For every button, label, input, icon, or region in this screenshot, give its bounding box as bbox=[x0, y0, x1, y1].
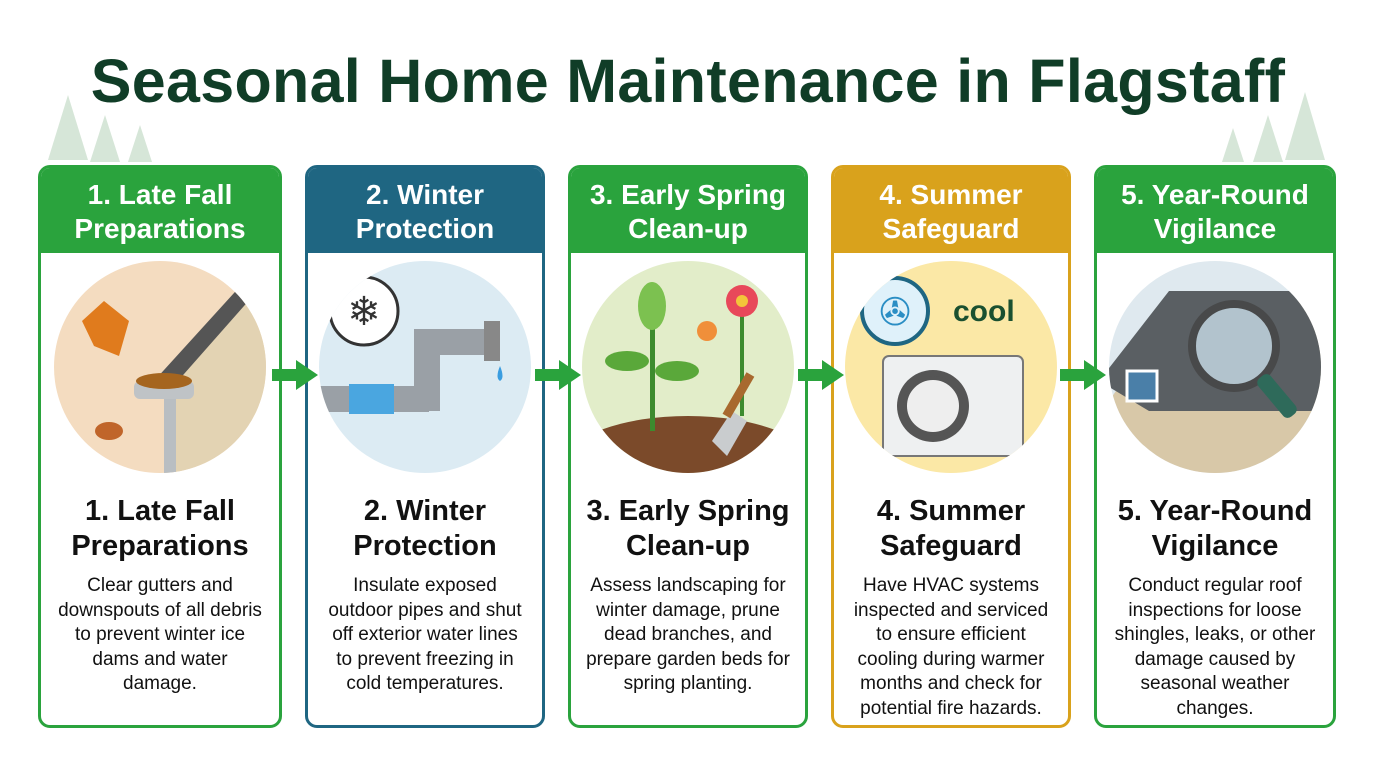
subtitle bbox=[71, 495, 249, 562]
header bbox=[571, 168, 805, 253]
header: 3. Early Spring bbox=[590, 179, 786, 210]
background trees bbox=[48, 92, 1325, 162]
panel: year-round bbox=[1094, 165, 1336, 728]
header bbox=[41, 168, 279, 253]
panel: summer bbox=[831, 165, 1071, 728]
header: 5. Year-Round bbox=[1121, 179, 1309, 210]
subtitle: 4. Summer bbox=[877, 495, 1025, 527]
icon: AC unit: ✇ bbox=[879, 292, 911, 334]
body text: Conduct regular roof inspections for loose shingles, leaks, or other damage caused by seasonal weather changes. bbox=[1115, 575, 1315, 718]
body text: Clear gutters and downspouts of all debris to prevent winter ice dams and water damage. bbox=[58, 575, 262, 694]
arrow bbox=[798, 360, 844, 390]
body text: Have HVAC systems inspected and serviced to ensure efficient cooling during warmer months and check for potential fire hazards. bbox=[854, 575, 1048, 718]
header: Safeguard bbox=[883, 213, 1019, 244]
subtitle: Safeguard bbox=[880, 530, 1022, 562]
subtitle: 1. Late Fall bbox=[85, 495, 235, 527]
subtitle: Clean-up bbox=[626, 530, 750, 562]
header: Vigilance bbox=[1154, 213, 1276, 244]
subtitle: Vigilance bbox=[1152, 530, 1278, 562]
header bbox=[308, 168, 542, 253]
icon: pipe and faucet bbox=[319, 261, 531, 473]
icon: AC unit: cool bbox=[953, 295, 1015, 328]
icon: gutter leaves bbox=[54, 261, 266, 473]
arrow bbox=[272, 360, 318, 390]
header: Clean-up bbox=[628, 213, 748, 244]
subtitle bbox=[1118, 495, 1312, 562]
subtitle: Protection bbox=[353, 530, 497, 562]
subtitle: Preparations bbox=[71, 530, 249, 562]
body text: Insulate exposed outdoor pipes and shut off exterior water lines to prevent freezing in cold temperatures. bbox=[328, 575, 522, 694]
body text: Assess landscaping for winter damage, prune dead branches, and prepare garden beds for spring planting. bbox=[586, 575, 790, 694]
header: Preparations bbox=[74, 213, 246, 244]
panel: winter bbox=[305, 165, 545, 728]
icon: pipe and faucet: ❄ bbox=[347, 290, 381, 334]
header: Protection bbox=[356, 213, 494, 244]
header bbox=[834, 168, 1068, 253]
icon: AC unit bbox=[845, 261, 1057, 473]
subtitle bbox=[877, 495, 1025, 562]
header bbox=[1097, 168, 1333, 253]
subtitle: 2. Winter bbox=[364, 495, 486, 527]
header: 1. Late Fall bbox=[88, 179, 232, 210]
arrow bbox=[1060, 360, 1106, 390]
subtitle: 3. Early Spring bbox=[586, 495, 790, 527]
panel: late fall bbox=[38, 165, 282, 728]
subtitle bbox=[586, 495, 790, 562]
icon: plants bbox=[582, 261, 794, 473]
header: 2. Winter bbox=[366, 179, 484, 210]
arrow bbox=[535, 360, 581, 390]
subtitle bbox=[353, 495, 497, 562]
panel: spring bbox=[568, 165, 808, 728]
subtitle: 5. Year-Round bbox=[1118, 495, 1312, 527]
title: Seasonal Home Maintenance in Flagstaff bbox=[91, 47, 1285, 115]
header: 4. Summer bbox=[879, 179, 1023, 210]
icon: roof magnifier bbox=[1109, 261, 1321, 473]
